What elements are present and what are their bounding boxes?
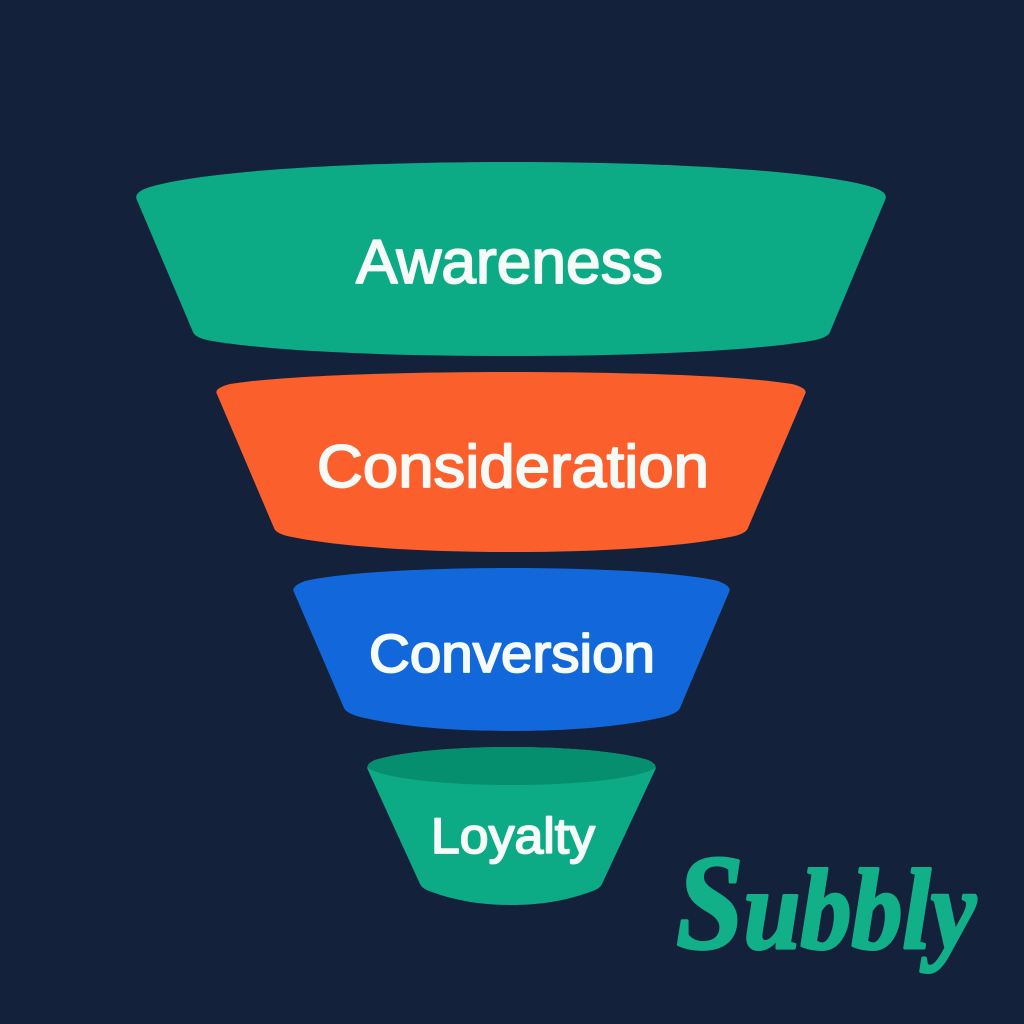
label: Consideration: Consideration — [317, 433, 709, 500]
funnel stage: Loyalty — [367, 747, 656, 905]
label: Conversion: Conversion — [369, 624, 655, 684]
funnel stage: Conversion — [293, 568, 730, 731]
funnel stage: Awareness — [136, 162, 886, 356]
label: Loyalty: Loyalty — [431, 808, 595, 864]
funnel stage: Consideration — [216, 372, 806, 552]
label: Awareness: Awareness — [356, 228, 663, 297]
logo: Subbly: Subbly — [676, 828, 976, 978]
funnel opening ellipse — [368, 747, 655, 785]
